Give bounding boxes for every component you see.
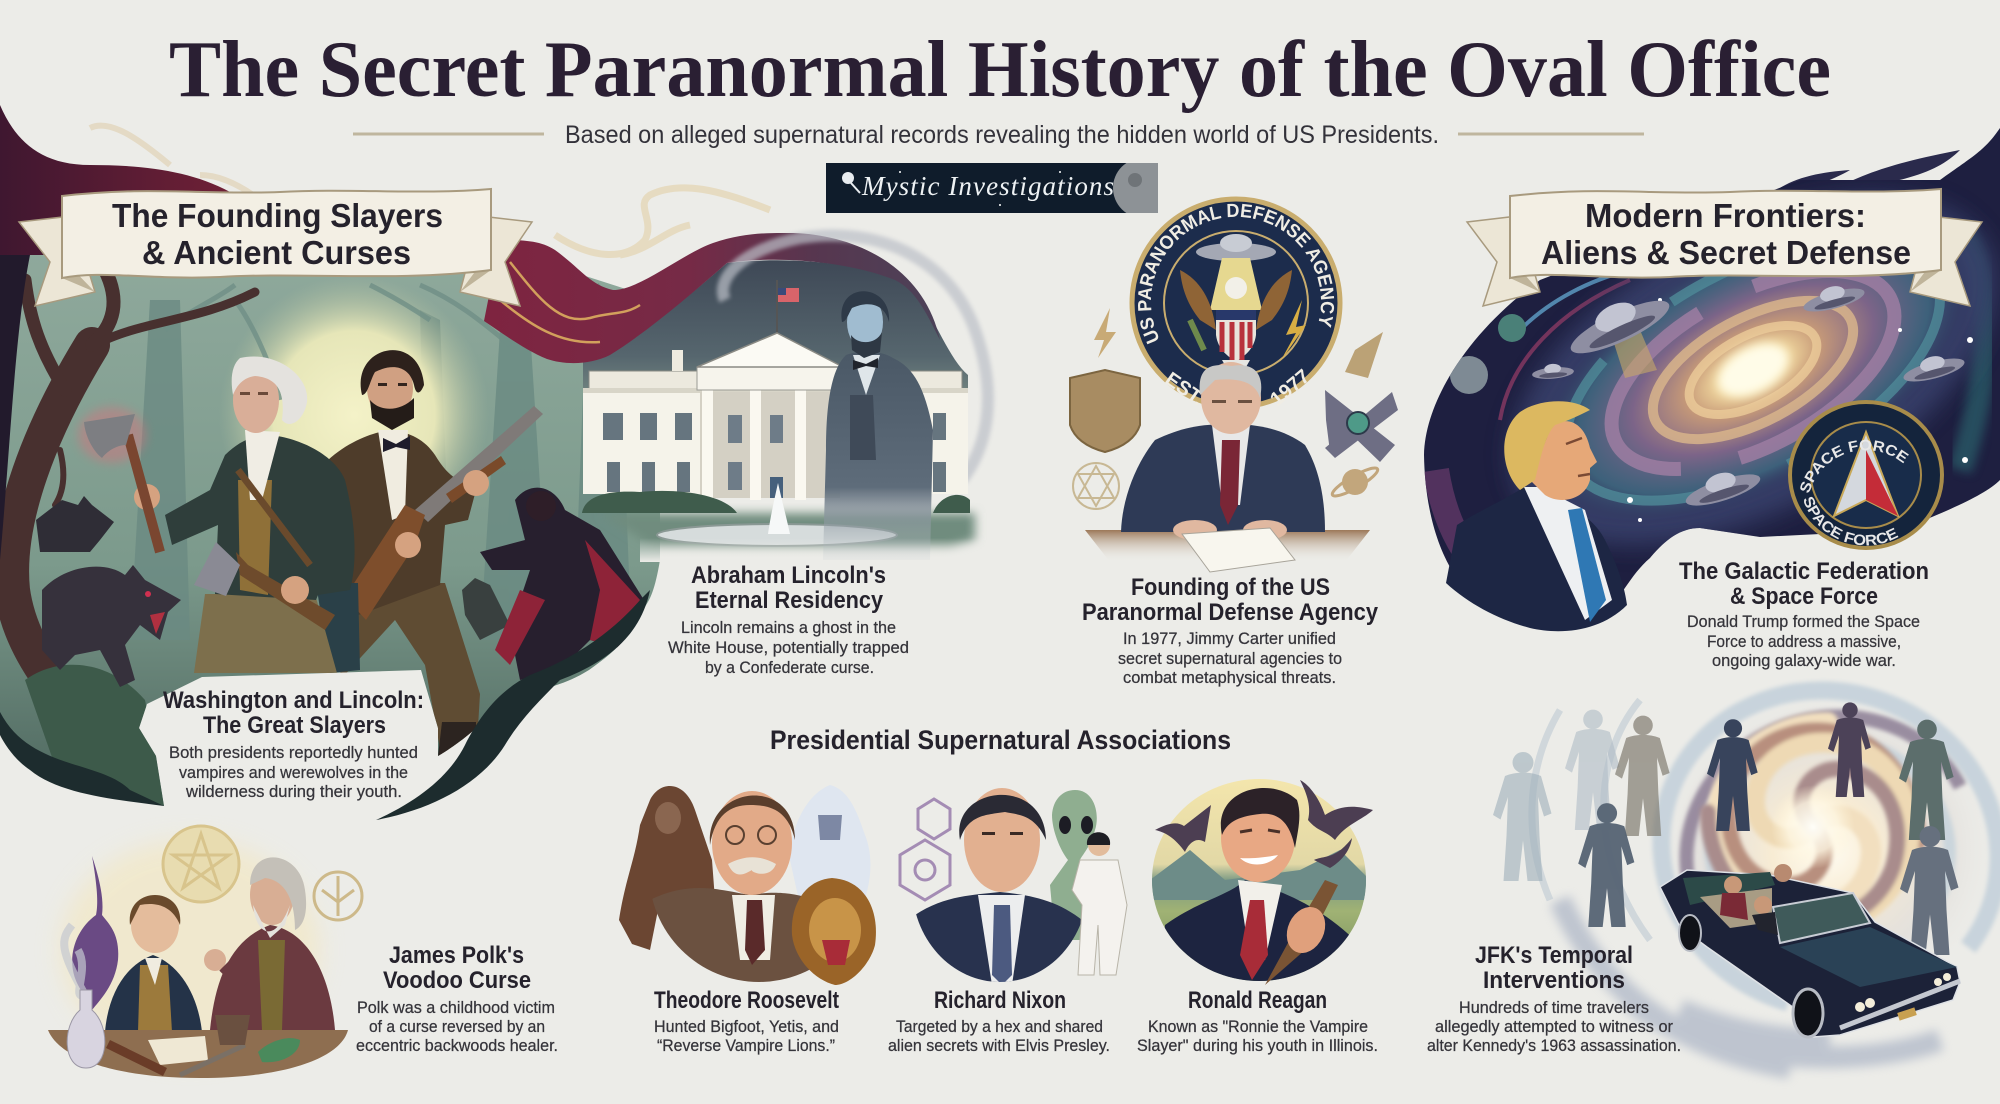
text: Washington and Lincoln: Both presidents reportedly hunted: [169, 743, 418, 762]
bats: [1155, 780, 1373, 868]
time travellers: [1493, 702, 1958, 955]
logo: Mystic Investigations: [826, 163, 1158, 213]
lightning icon: [1094, 308, 1116, 358]
hand: [1280, 901, 1332, 959]
purple potion: [72, 856, 118, 1010]
portrait: Richard Nixon: [900, 788, 1127, 990]
seal: 1977: [1266, 365, 1314, 411]
text: Washington and Lincoln: Washington and Lincoln:: [163, 687, 424, 714]
bare branches: [165, 285, 600, 400]
ghost swirl: [723, 235, 988, 480]
Washington figure: [134, 356, 360, 673]
Donald Trump figure: [1446, 401, 1627, 631]
flask: [67, 990, 105, 1068]
Reagan head: [1221, 794, 1295, 882]
maroon ribbon across the page: [484, 188, 940, 363]
wisps: [1772, 150, 1960, 194]
healer: [204, 857, 335, 1030]
hexagram icon: [1073, 463, 1119, 509]
rune circle: [314, 872, 362, 920]
Roosevelt suit: [640, 888, 880, 990]
portrait: Ronald Reagan: [1150, 778, 1373, 990]
cream wisps: [555, 188, 770, 255]
sheathed axe and grip: [236, 552, 335, 630]
banner: modern frontiers: Aliens & Secret Defense: [1541, 234, 1911, 271]
text: Founding of the US Paranormal Defense Agency: In 1977, Jimmy Carter unified: [1123, 629, 1336, 648]
forest scene: [0, 250, 680, 820]
third wolf: [462, 578, 510, 640]
text: James Polk's Voodoo Curse: James Polk's: [389, 942, 524, 969]
lion: [792, 878, 876, 985]
text: James Polk's Voodoo Curse: [356, 942, 558, 1055]
text: Galactic Federation and Space Force: The Galactic Federation: [1679, 558, 1929, 585]
Reagan hair: [1221, 788, 1299, 848]
text: JFK's Temporal Interventions: [1427, 942, 1681, 1055]
seal: EST.: [1161, 368, 1208, 410]
text: Galactic Federation and Space Force: ongoing galaxy-wide war.: [1712, 651, 1896, 670]
background wolf: [36, 496, 114, 552]
Space Force badge: SPACE FORCE: [1800, 440, 1909, 493]
text: Abraham Lincoln's Eternal Residency: by a Confederate curse.: [705, 658, 874, 677]
document: [1182, 528, 1295, 572]
flag: [777, 280, 799, 336]
smile: [1240, 855, 1278, 864]
moon glow: [228, 286, 480, 476]
boy Polk: [105, 895, 202, 1032]
text: James Polk's Voodoo Curse: eccentric backwoods healer.: [356, 1036, 558, 1055]
text: Founding of the US Paranormal Defense Agency: [1082, 574, 1379, 687]
Nixon suit: [915, 892, 1088, 990]
text: Founding of the US Paranormal Defense Agency: combat metaphysical threats.: [1123, 668, 1336, 687]
Space Force badge: SPACE FORCE: [1804, 496, 1898, 546]
smoke: [64, 925, 85, 996]
text: JFK's Temporal Interventions: alter Kennedy's 1963 assassination.: [1427, 1036, 1681, 1055]
panel: James Polk illustration: [48, 826, 362, 1078]
background trunks: [134, 300, 629, 608]
table with ingredients: [48, 1030, 348, 1078]
text: James Polk's Voodoo Curse: Polk was a childhood victim: [357, 998, 555, 1017]
text: James Polk's Voodoo Curse: of a curse reversed by an: [369, 1017, 545, 1036]
text: Richard Nixon: Richard Nixon: [934, 987, 1066, 1014]
text: Washington and Lincoln: wilderness during their youth.: [185, 782, 402, 801]
portrait: Theodore Roosevelt: [619, 785, 880, 990]
pentagram: [163, 826, 239, 902]
Jimmy Carter figure: [1121, 362, 1325, 540]
text: Theodore Roosevelt: Hunted Bigfoot, Yetis, and: [654, 1017, 839, 1036]
undergrowth: [25, 665, 164, 806]
text: Washington and Lincoln: vampires and werewolves in the: [179, 763, 408, 782]
Roosevelt head: [710, 791, 795, 895]
heading: Presidential Supernatural Associations: Presidential Supernatural Associations: [770, 725, 1231, 755]
relic icon: [1345, 332, 1383, 378]
fade to paper: [640, 538, 1010, 562]
hex sigils: [900, 799, 950, 900]
seal: US PARANORMAL DEFENSE AGENCY: [1138, 204, 1334, 344]
panel: JFK time vortex: [1493, 643, 2000, 1068]
storm sky behind the White House: [583, 260, 968, 420]
maroon ribbon left: [0, 105, 230, 300]
alien craft icon: [1325, 390, 1398, 462]
hedges: [582, 491, 970, 513]
text: Abraham Lincoln's Eternal Residency: White House, potentially trapped: [668, 638, 909, 657]
text: JFK's Temporal Interventions: Interventions: [1483, 967, 1625, 994]
bigfoot: [619, 786, 715, 950]
vortex: [1532, 643, 2000, 1068]
text: Founding of the US Paranormal Defense Agency: secret supernatural agencies to: [1118, 649, 1342, 668]
UFOs: [1531, 279, 1967, 512]
text: Founding of the US Paranormal Defense Agency: Paranormal Defense Agency: [1082, 599, 1379, 626]
banner: founding slayers: The Founding Slayers: [112, 197, 443, 234]
illustration: White House and Lincoln ghost: [582, 235, 1010, 562]
text: Galactic Federation and Space Force: Donald Trump formed the Space: [1687, 612, 1920, 631]
White House: [583, 333, 968, 500]
Lincoln ghost: [823, 291, 933, 560]
text: Galactic Federation and Space Force: [1679, 558, 1929, 670]
text: Abraham Lincoln's Eternal Residency: [668, 562, 909, 677]
text: Theodore Roosevelt: Theodore Roosevelt: [654, 987, 839, 1014]
foreground tree: [11, 270, 255, 720]
desk: [1085, 530, 1370, 562]
subtitle: Based on alleged supernatural records revealing the hidden world of US Presidents.: [565, 121, 1439, 149]
text: JFK's Temporal Interventions: JFK's Temporal: [1475, 942, 1633, 969]
text: Ronald Reagan: [1137, 987, 1378, 1055]
text: Washington and Lincoln: The Great Slayers: [203, 712, 386, 739]
panel: galaxy modern frontiers: [1424, 128, 2000, 632]
text: Theodore Roosevelt: [654, 987, 839, 1055]
text: JFK's Temporal Interventions: Hundreds of time travelers: [1459, 998, 1649, 1017]
text: Abraham Lincoln's Eternal Residency: Abraham Lincoln's: [691, 562, 886, 589]
Lincoln figure: [328, 350, 480, 760]
Nixon head: [959, 788, 1046, 892]
banner: modern frontiers: Modern Frontiers:: [1585, 197, 1866, 234]
badge: [1070, 370, 1140, 452]
text: Ronald Reagan: Slayer" during his youth in Illinois.: [1137, 1036, 1378, 1055]
title: The Secret Paranormal History of the Oval Office: [169, 26, 1831, 114]
planets: [1450, 314, 1526, 394]
text: Ronald Reagan: Known as "Ronnie the Vampire: [1148, 1017, 1368, 1036]
violet streaks: [1424, 468, 1464, 554]
alien: [1050, 790, 1100, 940]
werewolf: [42, 565, 181, 687]
text: Theodore Roosevelt: “Reverse Vampire Lions.”: [657, 1036, 835, 1055]
text: Ronald Reagan: Ronald Reagan: [1188, 987, 1327, 1014]
eyes: [1240, 830, 1280, 832]
text: Founding of the US Paranormal Defense Agency: Founding of the US: [1131, 574, 1330, 601]
ribbon wisps: [90, 126, 260, 200]
yeti: [790, 785, 870, 910]
rifle: [345, 406, 543, 620]
Elvis: [1072, 832, 1127, 975]
planet icon: [1329, 464, 1381, 500]
fountain: [768, 483, 790, 534]
stars: [1518, 218, 1973, 522]
banner: modern frontiers: [1467, 189, 1982, 306]
seal: [1130, 196, 1342, 411]
mortar: [215, 1015, 250, 1045]
lawn and pool: [600, 513, 975, 548]
text: Galactic Federation and Space Force: Force to address a massive,: [1707, 632, 1901, 651]
dark wisps at forest edge: [0, 590, 650, 820]
vampire: [480, 488, 644, 680]
wooden stake: [1265, 880, 1338, 985]
text: JFK's Temporal Interventions: allegedly attempted to witness or: [1435, 1017, 1673, 1036]
text: Washington and Lincoln: [163, 687, 424, 801]
text: Galactic Federation and Space Force: & Space Force: [1730, 583, 1878, 610]
text: Richard Nixon: Targeted by a hex and shared: [896, 1017, 1103, 1036]
text: Richard Nixon: alien secrets with Elvis Presley.: [888, 1036, 1110, 1055]
text: James Polk's Voodoo Curse: Voodoo Curse: [383, 967, 531, 994]
Space Force badge: [1790, 402, 1942, 550]
text: Abraham Lincoln's Eternal Residency: Eternal Residency: [695, 587, 884, 614]
panel: paranormal defense agency: [1069, 196, 1398, 572]
logo: Mystic Investigations: Mystic Investigations: [861, 171, 1114, 201]
panel: the founding slayers swoosh and forest: [0, 105, 680, 820]
Lincoln Continental: [1660, 864, 1960, 1037]
text: Abraham Lincoln's Eternal Residency: Lincoln remains a ghost in the: [681, 618, 896, 637]
text: Richard Nixon: [888, 987, 1110, 1055]
banner: founding slayers: [19, 189, 532, 306]
banner: founding slayers: & Ancient Curses: [142, 234, 411, 271]
seal UFO and eagle: [1180, 234, 1306, 385]
axe: [78, 407, 160, 552]
spiral galaxy: [1453, 122, 2000, 618]
